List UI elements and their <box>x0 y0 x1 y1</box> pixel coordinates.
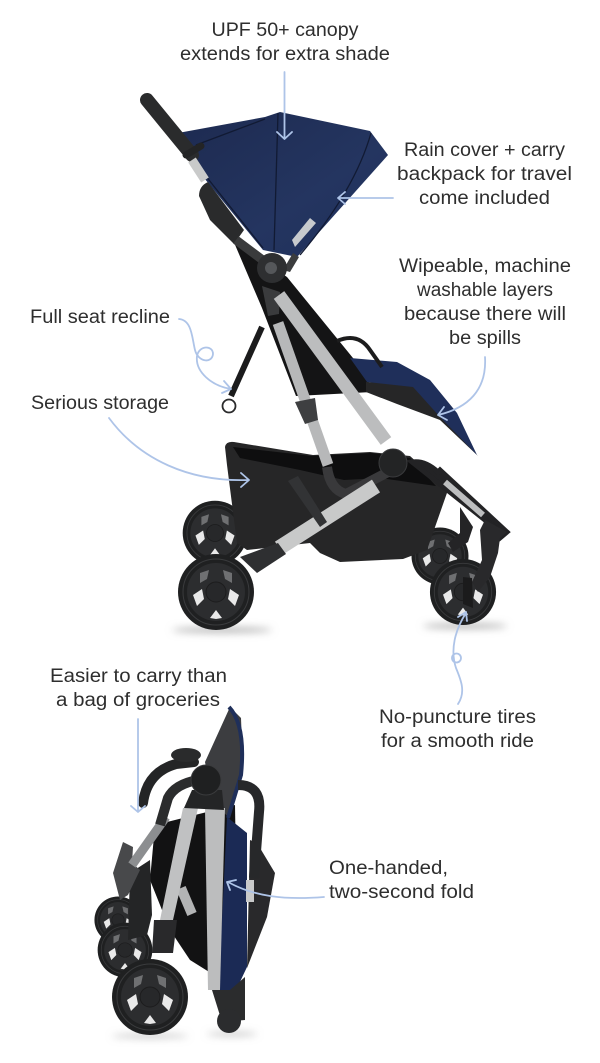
canopy logo tag <box>292 218 316 247</box>
arrow: canopy <box>277 72 292 139</box>
hub <box>257 253 299 283</box>
front wheel right <box>430 559 496 625</box>
folded hub <box>184 765 224 810</box>
stroller: folded <box>94 707 275 1035</box>
back rest edge blue <box>228 707 242 818</box>
arrow: tires loop <box>452 654 461 662</box>
folded arm <box>160 780 198 825</box>
text: fold: two-second fold <box>329 882 474 903</box>
footrest plate <box>113 842 140 900</box>
text: canopy: UPF 50+ canopy <box>212 20 359 41</box>
arrow: wipeable <box>438 357 485 420</box>
arrow: fold <box>227 880 324 898</box>
stroller: unfolded <box>147 100 507 630</box>
seat back pad <box>199 182 244 244</box>
silver tube right <box>205 808 225 990</box>
main hub <box>379 449 407 477</box>
text: carry: Easier to carry than <box>50 666 227 687</box>
side frame right <box>412 462 507 538</box>
arrow: tires <box>453 612 467 704</box>
silver frame short <box>278 323 328 465</box>
handle <box>147 100 205 180</box>
fork lower <box>472 520 507 592</box>
rear wheel back left <box>183 501 247 565</box>
frame cross link <box>327 467 392 494</box>
folded fabric <box>218 817 247 1003</box>
armrest <box>337 338 382 367</box>
footrest fabric <box>350 358 477 455</box>
knob <box>171 748 201 762</box>
bottom fork <box>212 977 245 1022</box>
small wheel <box>217 1009 241 1033</box>
folded right body <box>247 840 275 968</box>
text: rain cover: backpack for travel <box>397 164 572 185</box>
folded block <box>128 860 152 940</box>
text: rain cover: Rain cover + carry <box>404 140 566 161</box>
folded top handle <box>143 762 194 803</box>
folded grey bar <box>132 817 166 865</box>
text: carry <box>50 666 227 711</box>
arrow: recline <box>179 319 231 393</box>
text: canopy: extends for extra shade <box>180 44 390 65</box>
silver tube secondary <box>181 888 192 914</box>
silver right strip <box>445 482 483 515</box>
footrest underside <box>366 382 478 456</box>
text: wipeable: because there will <box>404 304 566 325</box>
basket interior <box>233 447 436 486</box>
folded back rest <box>205 707 243 818</box>
text: wipeable: Wipeable, machine <box>399 256 571 277</box>
silver frame long <box>279 295 386 441</box>
arm to hub <box>236 240 268 264</box>
text: tires <box>379 707 536 752</box>
text: tires: No-puncture tires <box>379 707 536 728</box>
lower joint <box>262 286 280 316</box>
rear folded wheels <box>94 896 152 977</box>
text: canopy <box>180 20 390 65</box>
folded handle silver <box>246 880 254 902</box>
folded body <box>150 805 238 990</box>
arrow: rain cover <box>338 192 393 204</box>
fork upper arm <box>448 507 473 552</box>
text: fold: One-handed, <box>329 858 448 879</box>
frame clamp <box>295 398 318 424</box>
ground shadows <box>112 624 507 1038</box>
wheel bracket <box>463 577 473 608</box>
recline strap and ring <box>222 327 262 412</box>
text: fold <box>329 858 474 903</box>
rear wheel back right <box>412 528 468 584</box>
text: storage: Serious storage <box>31 393 169 414</box>
text: wipeable <box>399 256 571 349</box>
basket <box>225 442 448 562</box>
lower silver tube <box>279 486 376 548</box>
text: wipeable: be spills <box>449 328 521 349</box>
arrow: groceries <box>131 719 145 812</box>
tube socket <box>152 920 177 953</box>
text: rain cover: come included <box>419 188 550 209</box>
silver tube left <box>160 808 198 920</box>
folded handle right <box>238 785 259 878</box>
text: carry: a bag of groceries <box>56 690 220 711</box>
arrow: storage <box>109 418 249 487</box>
text: tires: for a smooth ride <box>381 731 534 752</box>
text: wipeable: washable layers <box>416 280 553 301</box>
canopy seams <box>196 113 371 255</box>
canopy <box>178 112 388 257</box>
folded front wheel <box>112 959 188 1035</box>
basket strap <box>288 476 327 527</box>
text: rain cover <box>397 140 572 209</box>
text: recline: Full seat recline <box>30 307 170 328</box>
front wheel left <box>178 554 254 630</box>
seat <box>233 240 372 396</box>
lower tube end <box>240 543 286 573</box>
